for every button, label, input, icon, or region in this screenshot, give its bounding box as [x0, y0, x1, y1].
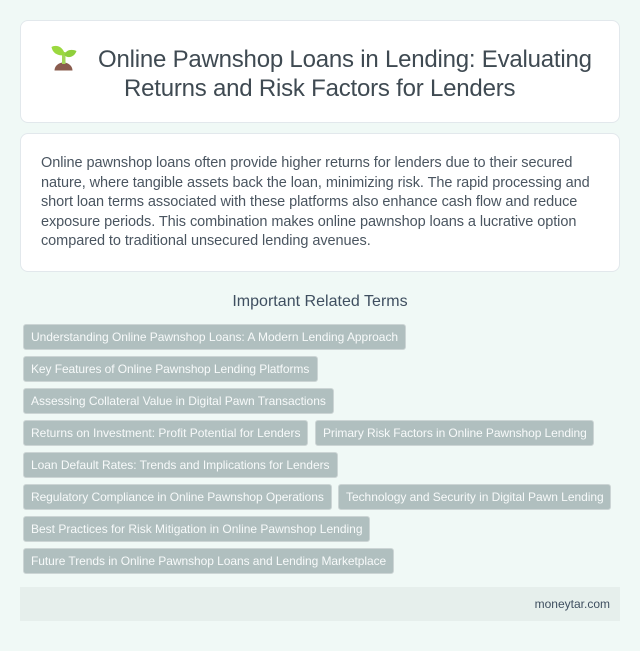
tag: Regulatory Compliance in Online Pawnshop Operations — [31, 490, 324, 504]
tag — [23, 548, 394, 574]
tag: Understanding Online Pawnshop Loans: A Modern Lending Approach — [31, 330, 398, 344]
title: Returns and Risk Factors for Lenders — [124, 75, 515, 102]
text block: summary paragraph — [41, 155, 590, 249]
tag — [23, 484, 332, 510]
tag — [23, 356, 318, 382]
tag — [338, 484, 611, 510]
panel: term tags — [23, 324, 611, 574]
tag: Assessing Collateral Value in Digital Pawn Transactions — [31, 394, 326, 408]
tag: Best Practices for Risk Mitigation in Online Pawnshop Lending — [31, 522, 362, 536]
tag — [315, 420, 594, 446]
text block: summary paragraph: short loan terms associated with these platforms also enhance cash flow and reduce — [41, 194, 577, 210]
heading: related terms: Important Related Terms — [232, 293, 408, 310]
tag: Key Features of Online Pawnshop Lending Platforms — [31, 362, 309, 376]
tag: Returns on Investment: Profit Potential for Lenders — [31, 426, 300, 440]
tag: Primary Risk Factors in Online Pawnshop Lending — [323, 426, 587, 440]
panel: summary — [20, 133, 620, 272]
text block: summary paragraph: compared to traditional unsecured lending avenues. — [41, 233, 371, 249]
title: Online Pawnshop Loans in Lending: Evaluating — [98, 46, 592, 73]
title — [98, 46, 592, 102]
footer text: moneytar.com — [535, 597, 610, 611]
tag — [23, 324, 406, 350]
footer bar — [20, 587, 620, 621]
tag — [23, 420, 308, 446]
panel: title card — [20, 20, 620, 123]
tag — [23, 452, 338, 478]
tag — [23, 388, 334, 414]
text block: summary paragraph: Online pawnshop loans often provide higher returns for lenders due to their secured — [41, 155, 572, 171]
tag: Future Trends in Online Pawnshop Loans and Lending Marketplace — [31, 554, 386, 568]
tag — [23, 516, 370, 542]
text block: summary paragraph: exposure periods. This combination makes online pawnshop loans a lucrative option — [41, 214, 576, 230]
tag: Loan Default Rates: Trends and Implications for Lenders — [31, 458, 330, 472]
text block: summary paragraph: nature, where tangible assets back the loan, minimizing risk. The rapid processing and — [41, 175, 590, 191]
tag: Technology and Security in Digital Pawn Lending — [346, 490, 604, 504]
icon: seedling — [52, 46, 76, 70]
